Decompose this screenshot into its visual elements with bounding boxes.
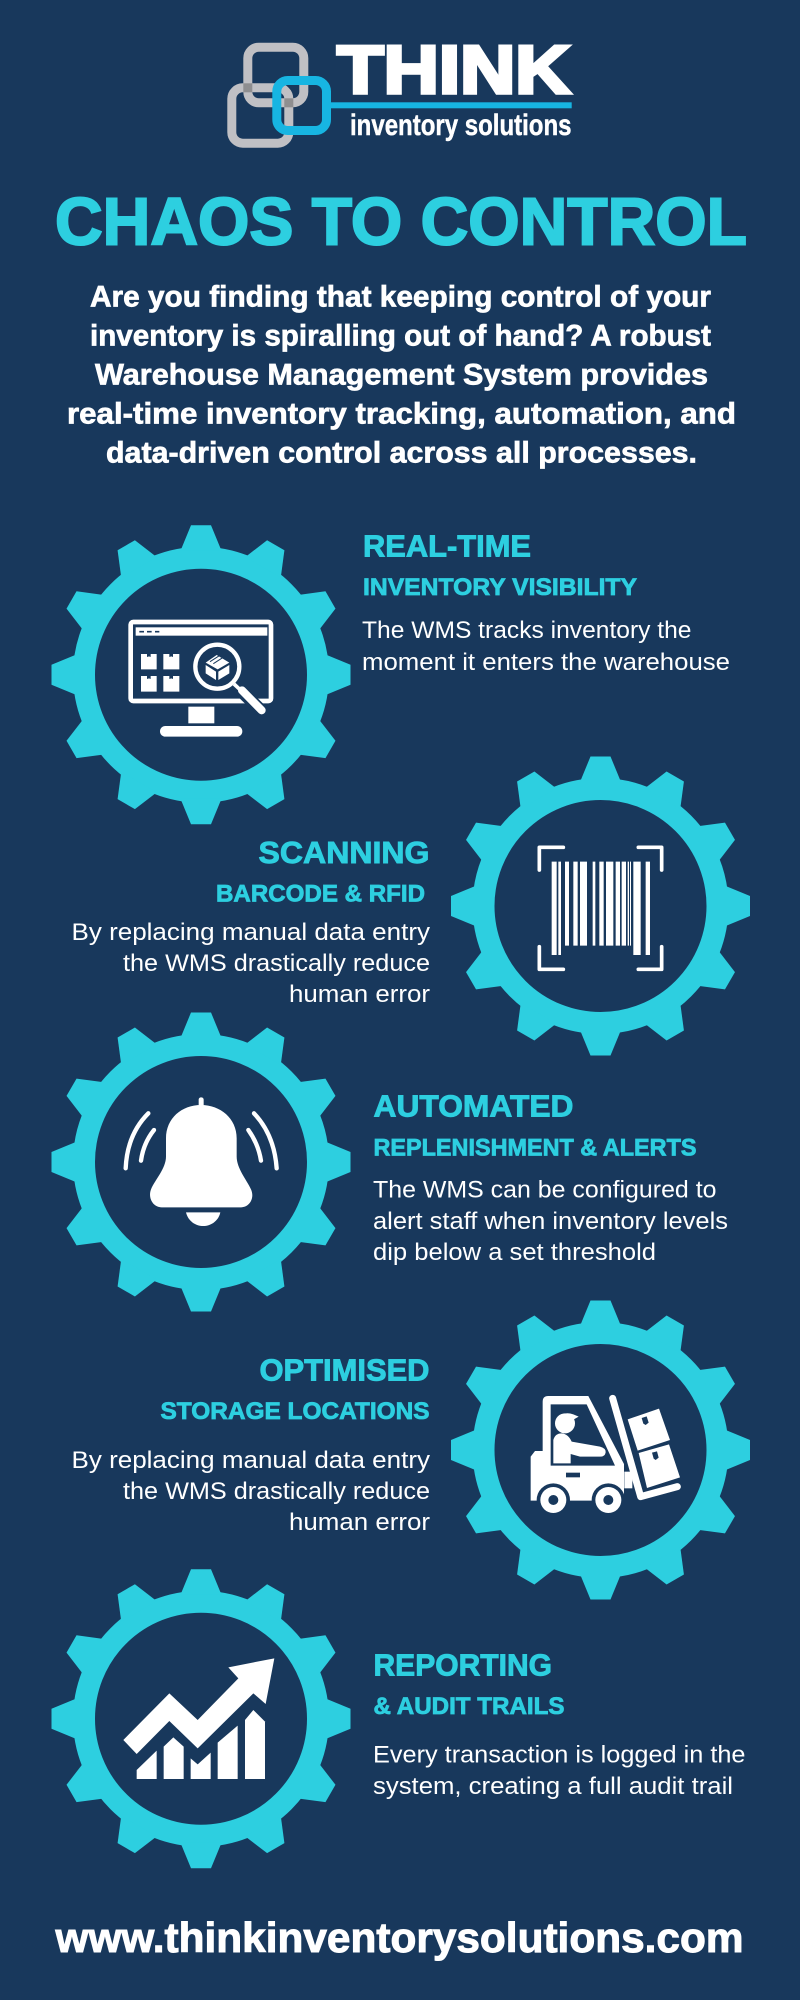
subheading: storage locations: STORAGE LOCATIONS <box>160 1398 430 1425</box>
intro paragraph: inventory is spiralling out of hand? A robust <box>90 320 711 352</box>
body: automated: alert staff when inventory levels <box>373 1208 728 1235</box>
gear: automated <box>52 1012 350 1312</box>
intro paragraph <box>67 280 736 470</box>
body: real-time: moment it enters the warehouse <box>362 649 730 676</box>
icon: ringing bell <box>126 1097 277 1226</box>
subheading: audit trails: & AUDIT TRAILS <box>374 1693 564 1720</box>
logo <box>232 32 572 143</box>
gear: real-time <box>52 525 350 824</box>
body: optimised: human error <box>289 1509 430 1536</box>
body: optimised: By replacing manual data entry <box>72 1447 431 1474</box>
body: reporting: system, creating a full audit trail <box>373 1773 733 1800</box>
footer url: www.thinkinventorysolutions.com <box>54 1914 744 1961</box>
subheading: barcode and RFID: BARCODE & RFID <box>216 880 425 908</box>
panel: real-time inventory visibility <box>52 525 730 824</box>
logo wordmark THINK: THINK <box>337 32 570 108</box>
body: automated <box>373 1176 728 1266</box>
heading: reporting: REPORTING <box>374 1648 552 1682</box>
icon: monitor with magnifier <box>131 622 271 737</box>
intro paragraph: real-time inventory tracking, automation, and <box>67 398 736 430</box>
logo rule <box>331 102 572 108</box>
body: reporting <box>373 1742 746 1800</box>
heading: scanning: SCANNING <box>258 835 430 870</box>
gear: optimised <box>451 1300 750 1600</box>
body: scanning: the WMS drastically reduce <box>123 950 430 977</box>
panel: reporting and audit trails <box>52 1569 746 1868</box>
panel: optimised storage locations <box>72 1300 750 1600</box>
subheading: inventory visibility: INVENTORY VISIBILITY <box>363 574 637 601</box>
body: optimised: the WMS drastically reduce <box>123 1478 430 1505</box>
panel: automated replenishment and alerts <box>52 1012 728 1312</box>
body: automated: dip below a set threshold <box>373 1239 656 1266</box>
body: real-time: The WMS tracks inventory the <box>362 617 692 644</box>
heading: optimised: OPTIMISED <box>260 1352 430 1388</box>
body: scanning <box>72 919 431 1008</box>
gear: scanning <box>451 756 750 1056</box>
body: scanning: By replacing manual data entry <box>72 919 431 946</box>
body: scanning: human error <box>289 981 430 1008</box>
body: optimised <box>72 1447 431 1536</box>
logo tagline: inventory solutions <box>350 109 572 142</box>
intro paragraph: Warehouse Management System provides <box>95 358 708 392</box>
gear: reporting <box>52 1569 350 1868</box>
subheading: replenishment and alerts: REPLENISHMENT & ALERTS <box>374 1134 696 1162</box>
logo mark: linked squares <box>232 47 326 143</box>
panel: scanning barcode and RFID <box>72 756 750 1056</box>
intro paragraph: data-driven control across all processes. <box>106 436 697 470</box>
icon: barcode <box>539 847 662 969</box>
heading: automated: AUTOMATED <box>374 1088 574 1124</box>
heading: real-time: REAL-TIME <box>363 528 531 564</box>
intro paragraph: Are you finding that keeping control of your <box>90 280 711 314</box>
body: reporting: Every transaction is logged in the <box>373 1742 746 1768</box>
icon: forklift with boxes <box>531 1396 680 1517</box>
title: CHAOS TO CONTROL <box>55 184 747 260</box>
icon: rising chart arrow <box>123 1658 274 1779</box>
body: automated: The WMS can be configured to <box>373 1176 716 1204</box>
body: real-time <box>362 617 730 676</box>
